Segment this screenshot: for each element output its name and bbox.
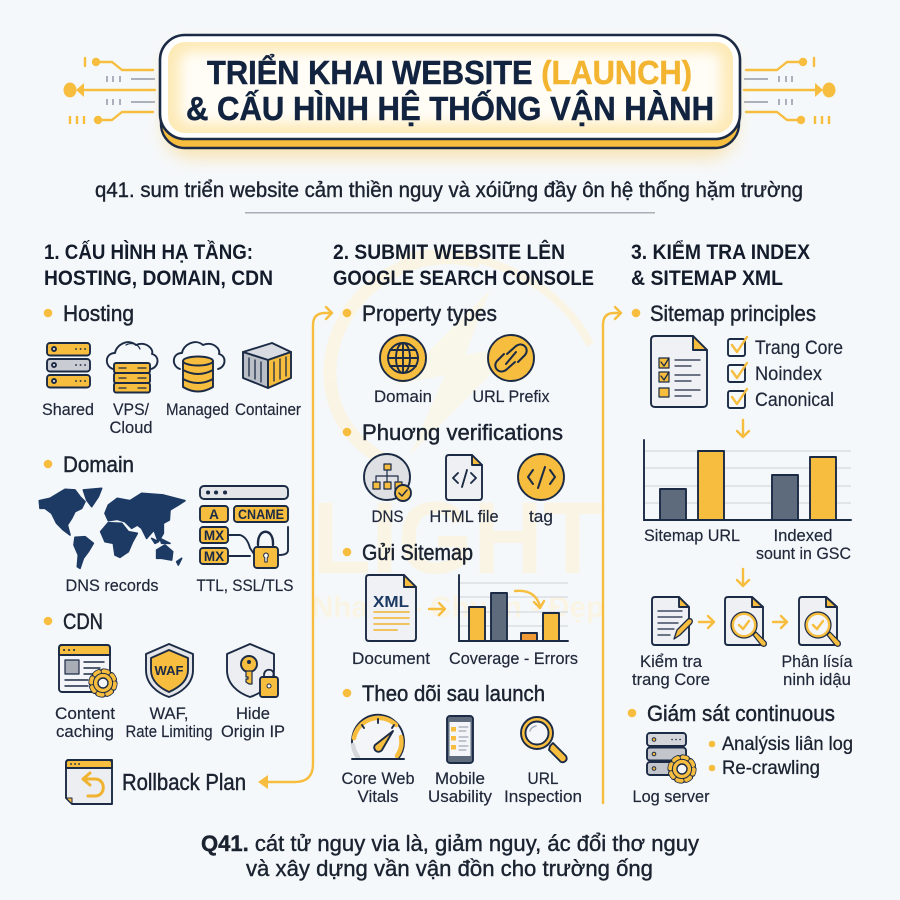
monitoring bullets: Re-crawling [722, 757, 820, 779]
continuous monitoring heading: Giám sát continuous [647, 701, 835, 726]
arrow [429, 603, 445, 615]
verification labels [372, 507, 553, 526]
verification labels: tag [529, 507, 553, 526]
icon: URL link [488, 335, 534, 381]
chart: sitemap vs indexed [644, 440, 851, 520]
icon: container [243, 343, 291, 388]
hosting labels: VPS/ [113, 400, 149, 419]
CDN labels: Content [55, 704, 115, 723]
column 3: index and sitemap check [628, 241, 853, 806]
watermark: LIGHT logo: LIGHT [312, 481, 602, 595]
verification labels: DNS [372, 507, 404, 526]
log server label: Log server [632, 787, 710, 806]
title text: & CẤU HÌNH HỆ THỐNG VẬN HÀNH [186, 89, 714, 127]
CDN heading: CDN [63, 609, 103, 634]
icon: HTML file [446, 455, 482, 500]
chart labels: sount in GSC [756, 544, 851, 563]
title text [186, 54, 714, 127]
property labels [374, 387, 550, 406]
icon: domain globe [380, 335, 426, 381]
checkbox list: Noindex [755, 364, 822, 385]
footer text [201, 831, 699, 881]
chart labels: Indexed [774, 526, 832, 545]
CDN labels: Origin IP [221, 722, 285, 741]
icon: DNS verification [364, 454, 411, 501]
icon: DNS records: CNAME [238, 507, 284, 522]
submit sitemap heading: Gửi Sitemap [362, 540, 473, 565]
icon: DNS records [200, 486, 288, 568]
arrow down [737, 420, 749, 437]
arrow [699, 616, 714, 628]
icon: shared server [47, 343, 90, 388]
circuit decoration right [744, 58, 836, 124]
monitoring bullets [709, 733, 853, 779]
icon: WAF shield [146, 644, 193, 697]
property labels: Domain [374, 387, 432, 406]
column 1 heading: 1. CẤU HÌNH HẠ TẦNG: [44, 241, 253, 264]
icon: mobile usability [447, 716, 473, 763]
CDN labels: caching [56, 722, 114, 741]
chart: coverage errors [459, 575, 568, 641]
icon: core web vitals gauge [352, 715, 404, 759]
column 3 heading: & SITEMAP XML [631, 267, 783, 290]
title text: TRIỂN KHAI WEBSITE (LAUNCH) [207, 54, 692, 91]
icon: XML document: XML [373, 594, 409, 611]
document step labels: Phân lísía [782, 652, 853, 671]
column 2 heading: GOOGLE SEARCH CONSOLE [333, 267, 594, 290]
column 1 heading [44, 241, 273, 290]
icon: inspect document [725, 597, 766, 646]
sitemap labels [352, 649, 578, 668]
document step labels: Kiểm tra [640, 652, 703, 671]
column 1 heading: HOSTING, DOMAIN, CDN [44, 267, 273, 290]
column 3 heading [631, 241, 810, 290]
verification heading: Phuơng verifications [362, 420, 563, 445]
icon: rollback plan [66, 760, 112, 804]
domain heading: Domain [63, 452, 134, 477]
hosting labels: Cloud [110, 418, 152, 437]
connector arrow: column 1 to column 2 [262, 307, 332, 782]
domain labels: DNS records [66, 576, 158, 595]
icon: URL inspection [521, 717, 567, 762]
icon: world map [39, 488, 185, 568]
sitemap labels: Coverage - Errors [449, 649, 578, 668]
hosting labels [42, 400, 301, 437]
icon: WAF shield: WAF [154, 663, 184, 678]
document step labels: ninh idậu [783, 670, 851, 689]
arrow down [737, 569, 749, 586]
chart labels: Sitemap URL [644, 526, 740, 545]
icon: DNS records: MX [204, 549, 224, 564]
icon: checklist document [651, 336, 707, 407]
icon: tag code [518, 454, 564, 500]
hosting heading: Hosting [63, 301, 134, 326]
watermark: LIGHT logo [312, 254, 604, 624]
hosting labels: Managed [166, 400, 229, 419]
column 1: infrastructure [39, 241, 301, 804]
monitoring labels: URL [528, 769, 558, 788]
icon: edit document [652, 597, 692, 645]
monitoring heading: Theo dõi sau launch [362, 681, 545, 706]
CDN labels [55, 704, 285, 741]
monitoring bullets: Analýsis liân log [722, 733, 853, 755]
checkbox list [728, 337, 843, 411]
icon: hide origin shield [227, 644, 278, 697]
document step labels [632, 652, 853, 689]
CDN labels: Hide [236, 704, 270, 723]
monitoring labels: Mobile [435, 769, 485, 788]
monitoring labels: Usability [428, 787, 492, 806]
property types heading: Property types [362, 301, 497, 326]
monitoring labels: Core Web [342, 769, 414, 788]
circuit decoration left [64, 58, 155, 124]
CDN labels: Rate Limiting [126, 722, 212, 741]
connector arrow head: rollback plan [258, 775, 268, 789]
connector arrow: column 2 to column 3 [603, 307, 621, 803]
chart labels [644, 526, 851, 563]
sitemap labels: Document [352, 649, 430, 668]
hosting labels: Container [235, 400, 301, 419]
icon: DNS records: MX [204, 528, 224, 543]
document step labels: trang Core [632, 670, 710, 689]
rollback plan label: Rollback Plan [122, 769, 246, 795]
footer text: và xây dựng vần vận đồn cho trường ống [246, 856, 653, 881]
icon: DNS records: A [209, 507, 219, 522]
verification labels: HTML file [430, 507, 498, 526]
subtitle: q41. sum triển website cảm thiền nguy và xóiững đầy ôn hệ thống hặm trường [95, 179, 803, 202]
domain labels [66, 576, 294, 595]
icon: managed database cloud [174, 342, 225, 392]
footer text: Q41. cát tử nguy via là, giảm nguy, ác đổi thơ nguy [201, 831, 699, 856]
icon: log server [647, 733, 694, 781]
CDN labels: WAF, [150, 704, 188, 723]
property labels: URL Prefix [472, 387, 550, 406]
monitoring labels: Vitals [358, 787, 398, 806]
arrow [773, 616, 787, 628]
icon: XML document [366, 575, 416, 641]
column 2 heading [333, 240, 594, 290]
checkbox list: Trang Core [755, 338, 843, 359]
CDN heading [44, 609, 103, 634]
monitoring labels: Inspection [504, 787, 582, 806]
icon: content caching [59, 645, 115, 695]
column 2 heading: 2. SUBMIT WEBSITE LÊN [333, 240, 565, 264]
hosting labels: Shared [42, 400, 94, 419]
checkbox list: Canonical [755, 390, 834, 411]
monitoring labels [342, 769, 582, 806]
icon: analysis document [799, 597, 840, 646]
sitemap principles heading: Sitemap principles [650, 301, 816, 326]
domain labels: TTL, SSL/TLS [196, 576, 294, 595]
icon: VPS cloud [107, 342, 158, 392]
watermark: LIGHT logo: Nhanh - Chuẩn - Đẹp [312, 591, 604, 624]
column 2: submit to search console [333, 240, 594, 806]
title panel [160, 35, 740, 157]
column 3 heading: 3. KIỂM TRA INDEX [631, 241, 810, 264]
